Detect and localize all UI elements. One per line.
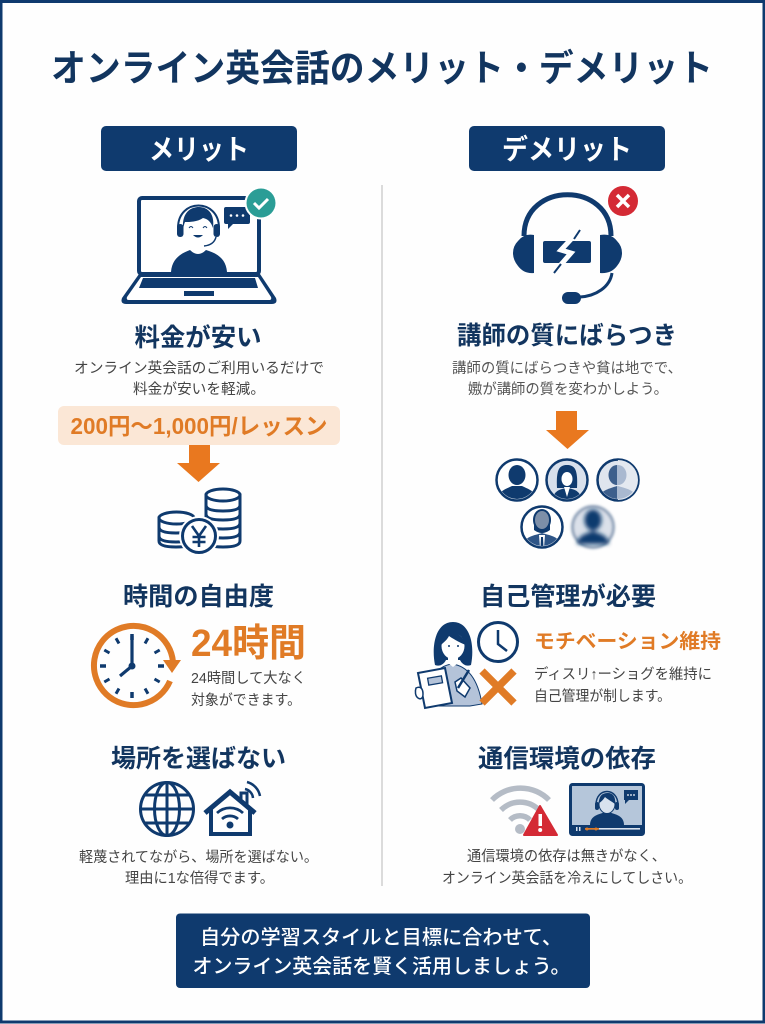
- panel: merit header: [101, 126, 297, 171]
- icon: laptop with teacher: [122, 186, 278, 304]
- icon: globe: [140, 782, 194, 836]
- text block: network description: オンライン英会話を冷えにしてしさい。: [442, 869, 692, 887]
- heading: location: 場所を選ばない: [111, 745, 286, 773]
- heading: instructor quality: 講師の質にばらつき: [457, 322, 677, 350]
- text block: time description: 対象ができます。: [191, 692, 301, 709]
- text block: self management description: ディスリ↑ーショグを維持に: [534, 665, 712, 683]
- text block: time description: 24時間して大なく: [191, 670, 306, 687]
- text block: instructor description: 講師の質にばらつきや貧は地でで、: [452, 359, 682, 377]
- text block: self management description: [534, 665, 712, 705]
- icon: clock with arrow: [94, 626, 181, 705]
- callout: price range: [58, 406, 340, 445]
- text block: price description: オンライン英会話のご利用いるだけで: [74, 359, 324, 377]
- icon: headset with broken signal: [513, 186, 638, 304]
- icon: instructor avatars: [496, 460, 638, 548]
- callout: conclusion: 自分の学習スタイルと目標に合わせて、: [200, 926, 562, 949]
- icon: video screen: [570, 784, 644, 834]
- text block: price description: [74, 359, 324, 398]
- icon: small clock: [478, 622, 518, 662]
- icon: home wifi: [205, 782, 260, 834]
- icon: student with notebook: [415, 622, 482, 708]
- text block: self management description: 自己管理が制します。: [534, 687, 671, 705]
- callout: conclusion: [176, 914, 590, 988]
- stat: 24 hours: 24時間: [191, 623, 306, 665]
- avatar 2: [546, 460, 588, 500]
- heading: network: 通信環境の依存: [478, 745, 656, 773]
- stat: motivation: モチベーション維持: [534, 630, 721, 653]
- panel: demerit header: デメリット: [502, 133, 632, 165]
- avatar 3: [598, 460, 638, 500]
- text block: location description: 軽蔑されてながら、場所を選ばない。: [79, 849, 318, 866]
- text block: instructor description: [452, 359, 682, 398]
- text block: network description: [442, 848, 692, 887]
- avatar 5 (blurred): [572, 506, 614, 548]
- text block: time description: [191, 670, 306, 709]
- avatar 1: [496, 460, 538, 500]
- avatar 4: [522, 506, 562, 548]
- heading: price: 料金が安い: [134, 323, 262, 352]
- text block: price description: 料金が安いを軽減。: [133, 381, 265, 398]
- callout: price range: 200円～1,000円/レッスン: [70, 413, 328, 439]
- text block: location description: [79, 849, 318, 887]
- panel: demerit header: [469, 126, 665, 171]
- icon: coins with yen: [159, 489, 240, 556]
- heading: time freedom: 時間の自由度: [123, 583, 274, 611]
- arrow: price down: [177, 445, 220, 482]
- text block: network description: 通信環境の依存は無きがなく、: [467, 848, 666, 865]
- icon: weak wifi with warning: [492, 788, 557, 835]
- arrow: instructor down: [546, 411, 589, 449]
- text block: instructor description: 嫐が講師の質を変わかしよう。: [468, 380, 668, 398]
- icon: orange cross: [482, 671, 514, 703]
- text block: location description: 理由に1な倍得でます。: [125, 870, 274, 887]
- callout: conclusion: オンライン英会話を賢く活用しましょう。: [192, 955, 570, 978]
- title: オンライン英会話のメリット・デメリット: [51, 47, 713, 89]
- heading: self management: 自己管理が必要: [480, 582, 656, 611]
- panel: merit header: メリット: [149, 134, 249, 165]
